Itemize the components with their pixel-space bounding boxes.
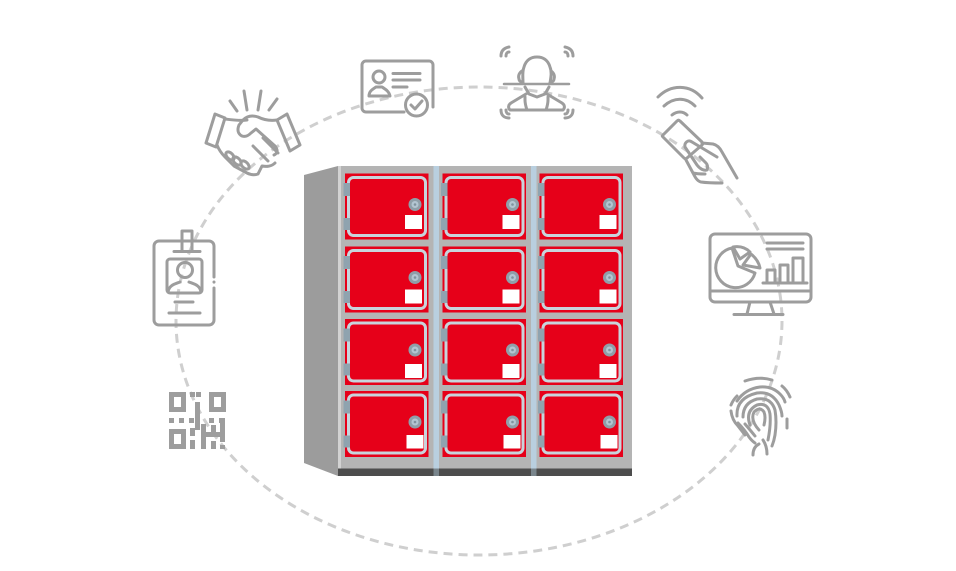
dashed ellipse [176, 87, 782, 555]
icon: contactless card in hand [658, 87, 737, 183]
icon: handshake [206, 91, 300, 175]
locker doors [344, 174, 623, 457]
icon: QR code [169, 392, 226, 449]
locker base [338, 468, 632, 476]
icon: face scan [501, 47, 573, 118]
locker unit [304, 166, 632, 476]
icon: monitor with charts [710, 234, 811, 314]
locker front [338, 166, 632, 476]
icon: fingerprint [731, 378, 790, 455]
locker side panel [304, 166, 338, 476]
icon: ID card with check [362, 61, 433, 116]
icon: ID badge [154, 231, 214, 325]
door labels [405, 215, 618, 448]
